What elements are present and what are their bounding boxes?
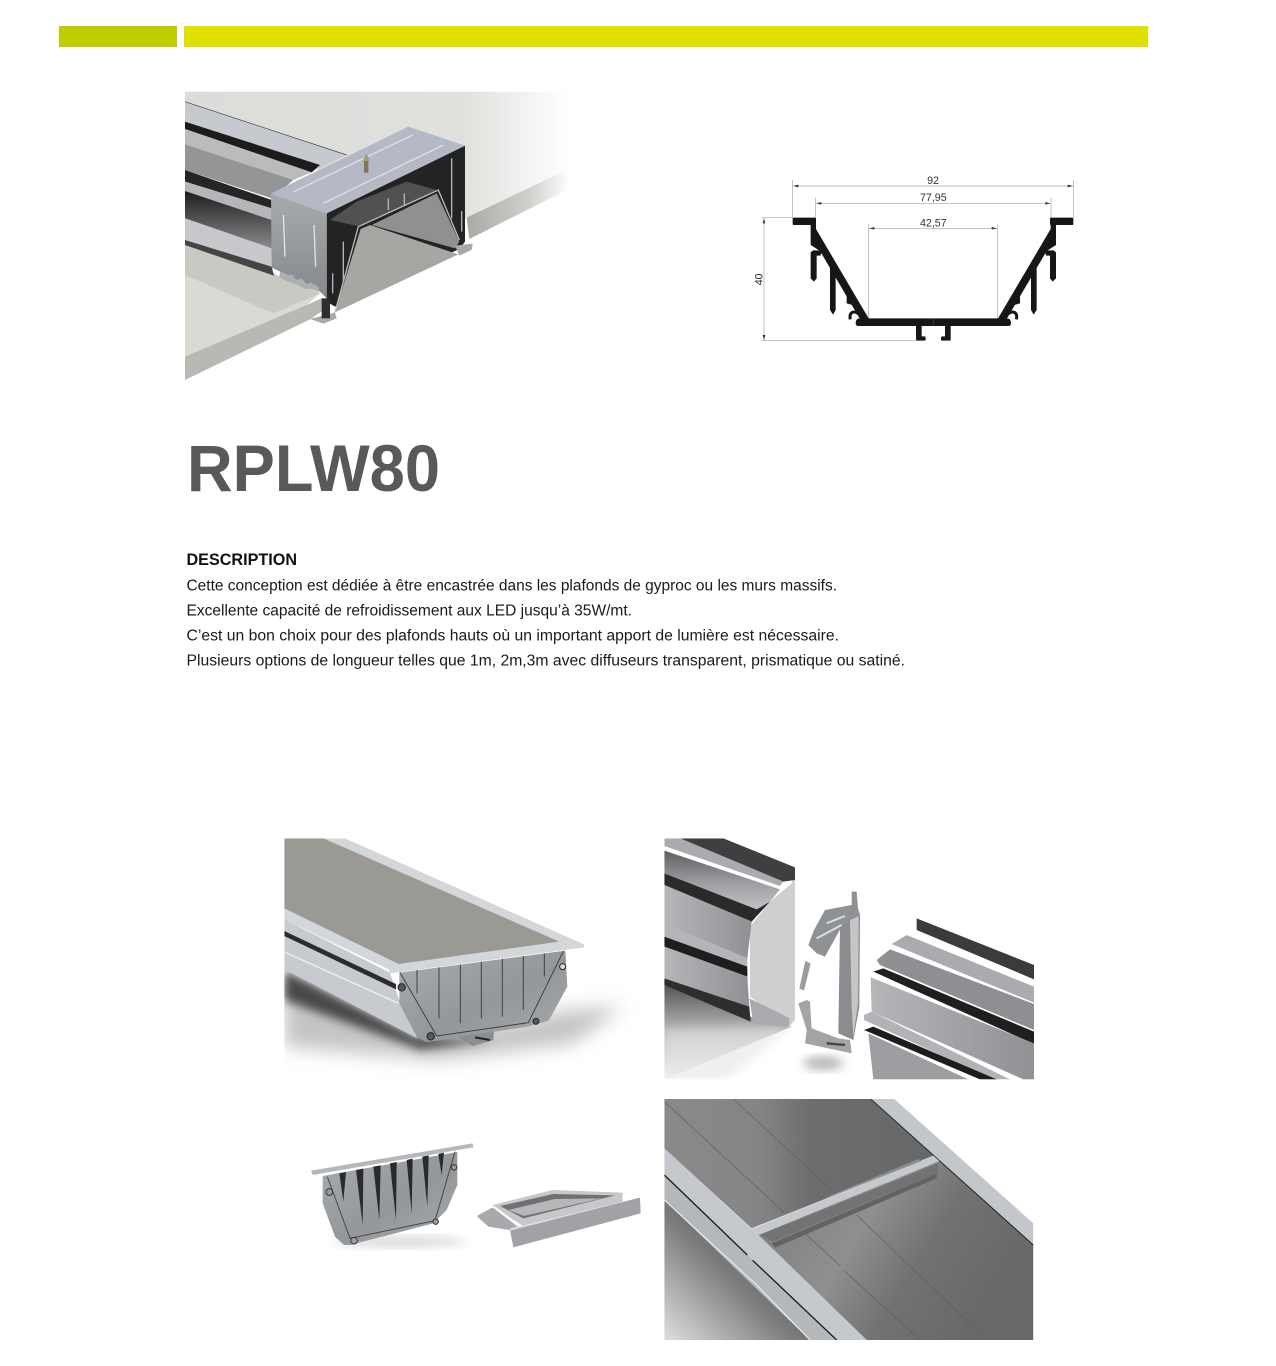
housing interior <box>327 146 465 307</box>
slots <box>293 135 443 203</box>
extruded profile body <box>185 102 347 276</box>
dimension labels: 42,57 <box>920 217 947 229</box>
dimension lines <box>762 180 1073 341</box>
dimension labels <box>754 175 947 285</box>
end cap <box>399 951 567 1042</box>
dimension labels: 40 <box>754 273 766 285</box>
cap screws <box>326 1165 457 1244</box>
bottom flange left <box>310 312 337 324</box>
description line 3: C’est un bon choix pour des plafonds hauts où un important apport de lumière est nécessaire. <box>186 628 839 644</box>
illustration: recessed profile installed in ceiling <box>185 92 570 380</box>
description line 2: Excellente capacité de refroidissement aux LED jusqu’à 35W/mt. <box>186 602 632 620</box>
inner end shadow <box>760 1163 938 1242</box>
tray bracket <box>510 1198 641 1247</box>
header bar: green segment <box>59 26 177 47</box>
description line 1: Cette conception est dédiée à être encastrée dans les plafonds de gyproc ou les murs massifs. <box>186 578 837 594</box>
inner bracket <box>330 182 437 227</box>
crossbar <box>752 1156 939 1235</box>
diffuser rim <box>335 190 459 312</box>
description heading: DESCRIPTION <box>186 551 297 569</box>
ceiling edge band <box>466 172 564 239</box>
dimension labels: 77,95 <box>920 192 947 204</box>
frame <box>284 838 584 973</box>
clip shadow <box>803 1057 843 1070</box>
floor shadow fade <box>664 1027 792 1079</box>
bottom foot <box>457 1032 494 1046</box>
right half of profile <box>933 218 1073 341</box>
photo: exploded profile and clip <box>664 838 1034 1079</box>
threaded stud <box>363 153 370 173</box>
textured diffuser <box>335 225 458 312</box>
tray floor <box>508 1198 602 1216</box>
slit lines <box>664 1175 837 1340</box>
dimension labels: 92 <box>927 175 939 187</box>
technical cross-section drawing <box>754 175 1073 341</box>
description line 4: Plusieurs options de longueur telles que 1m, 2m,3m avec diffuseurs transparent, prismatique ou satiné. <box>186 652 905 670</box>
bottom flange right <box>455 244 473 256</box>
reflector side wall <box>372 193 459 248</box>
slab edge <box>185 298 325 380</box>
housing top plate <box>271 127 465 213</box>
tray outer rim <box>493 1190 623 1226</box>
photo: diffuser close-up <box>664 1099 1033 1340</box>
crossbar shadow <box>823 1159 922 1198</box>
title: RPLW80 <box>187 431 440 505</box>
tray flange top <box>510 1198 640 1231</box>
screws <box>398 964 566 1040</box>
ceiling upper surface <box>185 92 570 218</box>
diffuser panel <box>284 838 559 964</box>
side slots <box>283 215 316 267</box>
cap body <box>323 1152 457 1245</box>
cap diagonal grooves <box>327 1152 455 1238</box>
side extrusion <box>664 1175 837 1340</box>
contact shadow <box>284 970 493 1050</box>
shadow corner <box>664 1200 810 1340</box>
slab recess band <box>185 245 320 313</box>
ground shadow <box>333 1236 467 1247</box>
side extrusion <box>284 919 417 1038</box>
cap lip <box>311 1143 473 1175</box>
floor shadow <box>664 980 792 1079</box>
right extrusion <box>864 918 1034 1079</box>
guide lines <box>664 1099 987 1340</box>
dimension arrowheads <box>763 185 1073 340</box>
left extrusion <box>664 838 795 1027</box>
far frame <box>870 1099 1033 1245</box>
upper diffuser <box>664 1099 933 1228</box>
photo: end cap and accessory tray <box>311 1143 641 1247</box>
cap ribs <box>400 951 563 1036</box>
inner end highlight <box>772 1173 937 1248</box>
tray mounting plate <box>477 1207 520 1231</box>
lower ceiling slab <box>185 242 320 357</box>
serrated clip <box>279 272 319 292</box>
cap ribs <box>339 1153 444 1225</box>
lower diffuser <box>758 1161 1033 1340</box>
housing side plate <box>271 193 327 298</box>
side highlight <box>284 952 399 1003</box>
left half of profile <box>793 218 933 341</box>
tray inner wall <box>500 1194 615 1218</box>
photo: profile with end cap <box>284 838 623 1060</box>
description block <box>186 551 905 670</box>
side slit <box>284 931 396 989</box>
header bar: yellow segment <box>184 26 1148 47</box>
fins <box>333 158 462 293</box>
near frame <box>664 1148 867 1340</box>
soft floor shadow <box>284 977 623 1060</box>
end clip frame <box>798 892 860 1053</box>
